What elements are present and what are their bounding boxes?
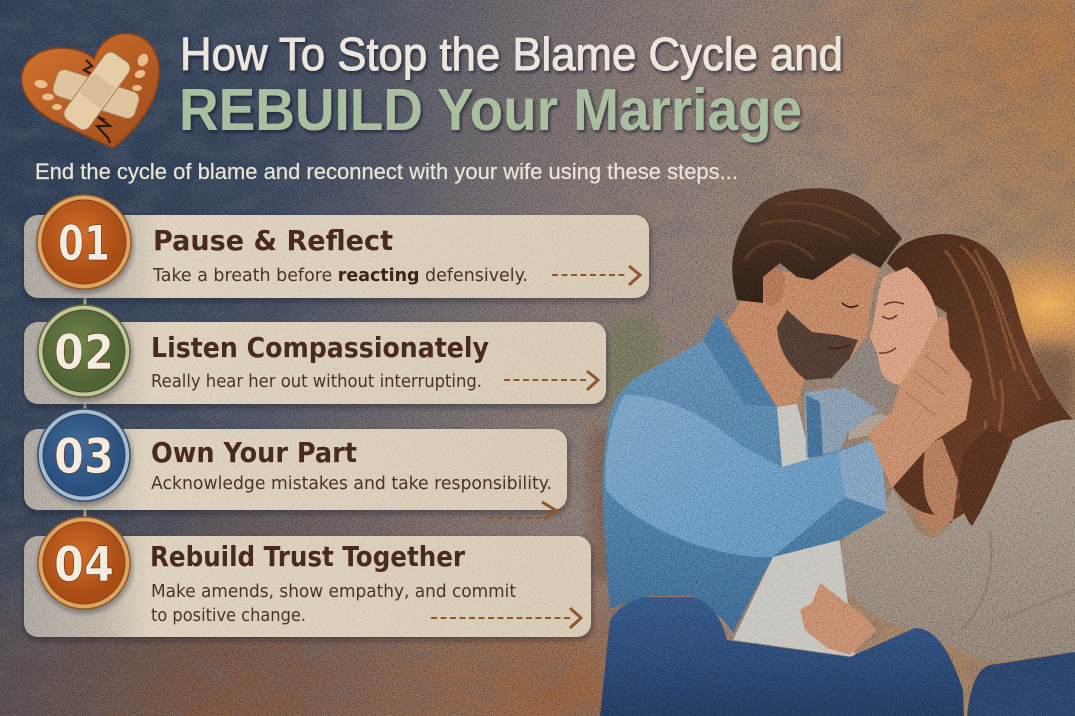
description line 1: Make amends, show empathy, and commit — [151, 582, 516, 602]
shirt sleeve — [605, 395, 845, 557]
description line 2: to positive change. — [151, 606, 306, 626]
woman's hair — [887, 234, 1073, 525]
woman's eye, brow and smile — [879, 302, 904, 353]
shirt placket — [806, 395, 823, 458]
man's hair strands — [745, 203, 880, 260]
man's ear — [762, 267, 785, 306]
man's neck and face — [727, 255, 880, 407]
arrow — [431, 608, 581, 628]
heading: Pause & Reflect — [153, 224, 393, 257]
arrow — [552, 266, 640, 285]
man's eye and mouth — [828, 303, 858, 349]
card grain — [24, 536, 591, 637]
description: Take a breath before reacting defensively. — [152, 266, 528, 286]
connector dots between steps — [84, 296, 86, 522]
woman's face — [870, 267, 938, 385]
heading: Rebuild Trust Together — [150, 540, 465, 573]
droplets — [34, 52, 150, 110]
card background — [24, 536, 591, 637]
title — [179, 28, 843, 143]
badge 01 — [37, 195, 131, 289]
description: Acknowledge mistakes and take responsibility. — [151, 474, 552, 494]
subtitle: End the cycle of blame and reconnect with your wife using these steps... — [35, 159, 738, 184]
jeans right knee — [967, 652, 1075, 716]
man's beard — [777, 310, 858, 380]
step 1 card — [24, 195, 649, 298]
man's t-shirt — [733, 403, 855, 657]
badge 03 — [38, 409, 130, 501]
badge 03: 03 — [54, 429, 114, 485]
photo: couple embracing — [600, 188, 1075, 716]
card background — [24, 429, 567, 510]
badge 04 — [38, 517, 130, 609]
crack lines — [84, 60, 110, 143]
step 3 card — [24, 409, 567, 519]
shirt right panel — [805, 388, 878, 458]
badge 01: 01 — [58, 216, 110, 272]
title line 2: REBUILD Your Marriage — [179, 77, 802, 143]
bandage pad — [79, 73, 115, 108]
man's hair — [732, 188, 902, 303]
woman's hand — [800, 583, 877, 655]
description: Really hear her out without interrupting. — [151, 372, 482, 392]
step 2 card — [24, 305, 606, 404]
card grain — [24, 322, 606, 404]
icon: bandaged heart — [22, 33, 159, 148]
badge 04: 04 — [54, 537, 114, 593]
man's forearm and hand — [868, 317, 972, 488]
shirt cuff — [838, 437, 887, 512]
heading: Listen Compassionately — [151, 331, 489, 364]
badge 02 — [38, 305, 130, 397]
arrow — [488, 502, 557, 519]
card grain — [24, 429, 567, 510]
shirt collar — [703, 315, 777, 407]
heading: Own Your Part — [151, 436, 357, 469]
woman's sweater — [840, 420, 1075, 662]
badge 02: 02 — [54, 325, 114, 381]
sweater arm fold — [960, 530, 1075, 630]
man's denim shirt — [603, 315, 887, 632]
card grain — [24, 215, 649, 298]
knuckle and finger lines — [905, 355, 950, 415]
woman's hair highlights — [915, 245, 1040, 510]
bandage horizontal — [51, 67, 141, 121]
step 4 card — [24, 517, 591, 637]
card background — [24, 215, 649, 298]
woman's hair front locks — [893, 425, 1010, 526]
woman's neck and chest — [917, 438, 958, 532]
jeans — [600, 597, 964, 716]
arrow — [504, 371, 598, 390]
title line 1: How To Stop the Blame Cycle and — [180, 28, 843, 80]
sweater left shoulder — [848, 413, 895, 440]
bandage diagonal — [61, 49, 133, 133]
card background — [24, 322, 606, 404]
